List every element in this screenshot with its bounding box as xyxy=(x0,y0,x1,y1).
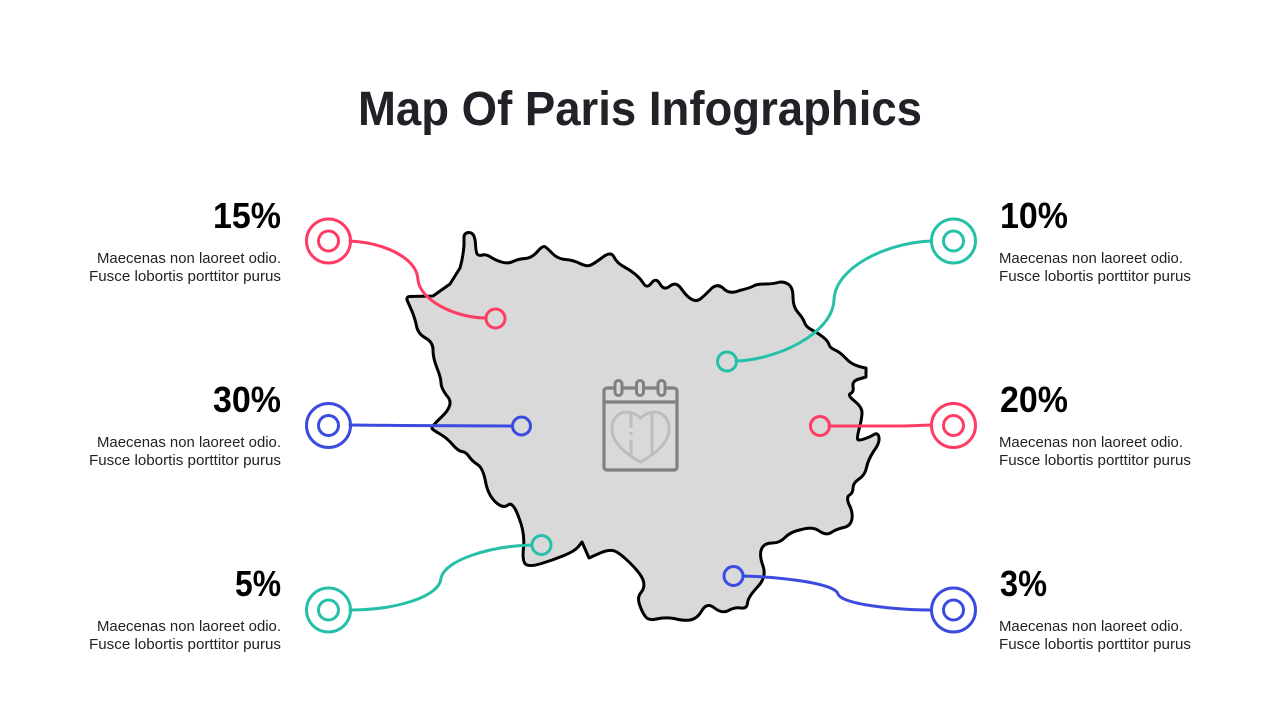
text block: 20% xyxy=(999,379,1191,469)
map of Paris region xyxy=(407,232,879,620)
text block: 10%: Fusce lobortis porttitor purus xyxy=(999,269,1191,285)
marker: 30% blue xyxy=(306,404,350,448)
marker: 15% pink xyxy=(306,219,350,263)
text block: 3%: Fusce lobortis porttitor purus xyxy=(999,637,1191,653)
text block: 15%: 15% xyxy=(213,195,281,236)
connector: 30% blue xyxy=(350,417,530,435)
text block: 10%: 10% xyxy=(1000,195,1068,236)
text block: 30%: 30% xyxy=(213,379,281,420)
connector: 20% pink xyxy=(810,416,931,436)
text block: 20%: Maecenas non laoreet odio. xyxy=(999,435,1183,451)
marker: 3% blue xyxy=(932,588,976,632)
text block: 3% xyxy=(999,563,1191,653)
marker: 10% teal xyxy=(932,219,976,263)
text block: 15%: Maecenas non laoreet odio. xyxy=(97,251,281,267)
text block: 10% xyxy=(999,195,1191,285)
text block: 15%: Fusce lobortis porttitor purus xyxy=(89,269,281,285)
text block: 5%: Maecenas non laoreet odio. xyxy=(97,619,281,635)
connector: 15% pink xyxy=(350,241,505,328)
text block: 5% xyxy=(89,563,281,653)
text block: 15% xyxy=(89,195,281,285)
text block: 20%: Fusce lobortis porttitor purus xyxy=(999,453,1191,469)
connector: 10% teal xyxy=(718,241,931,371)
marker: 5% teal xyxy=(306,588,350,632)
connector: 3% blue xyxy=(724,566,931,610)
connector: 5% teal xyxy=(350,536,551,610)
text block: 3%: Maecenas non laoreet odio. xyxy=(999,619,1183,635)
title: Map Of Paris Infographics xyxy=(358,83,922,136)
text block: 3%: 3% xyxy=(1000,563,1047,604)
text block: 30% xyxy=(89,379,281,469)
text block: 20%: 20% xyxy=(1000,379,1068,420)
text block: 5%: 5% xyxy=(235,563,281,604)
marker: 20% pink xyxy=(932,404,976,448)
text block: 5%: Fusce lobortis porttitor purus xyxy=(89,637,281,653)
text block: 30%: Maecenas non laoreet odio. xyxy=(97,435,281,451)
text block: 10%: Maecenas non laoreet odio. xyxy=(999,251,1183,267)
icon: calendar with heart xyxy=(604,380,677,470)
text block: 30%: Fusce lobortis porttitor purus xyxy=(89,453,281,469)
